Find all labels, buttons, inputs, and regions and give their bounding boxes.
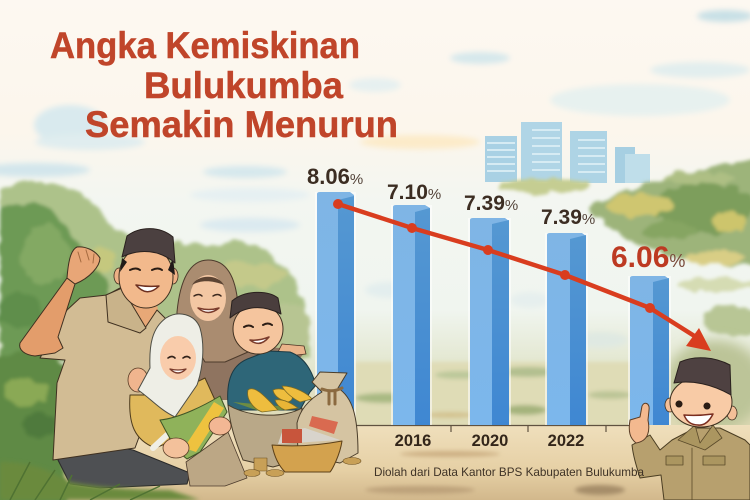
coins xyxy=(244,458,361,476)
father xyxy=(20,229,190,488)
skirt xyxy=(186,432,247,486)
yellow top xyxy=(130,378,215,448)
raised arm xyxy=(20,278,75,356)
bar 2016 group xyxy=(315,192,356,425)
corn held by girl xyxy=(160,396,231,459)
year label 2020: 2020 xyxy=(472,432,508,450)
uniform xyxy=(632,428,750,500)
face xyxy=(160,336,196,380)
neck xyxy=(118,285,160,332)
title: Angka Kemiskinan xyxy=(50,25,360,66)
value label 2016: 8.06% xyxy=(307,164,363,189)
ground shadows xyxy=(365,451,625,495)
cap xyxy=(122,229,175,263)
eyes xyxy=(676,401,710,409)
far right hills xyxy=(665,340,750,430)
value label bar 3: 7.39% xyxy=(464,192,518,215)
axis line xyxy=(316,425,640,432)
shirt xyxy=(40,288,165,460)
trend arrow xyxy=(333,199,711,351)
cuff xyxy=(153,435,167,448)
cap xyxy=(674,358,731,395)
year label 2016: 2016 xyxy=(395,432,431,450)
bar 3 xyxy=(468,218,511,425)
hand xyxy=(629,403,649,443)
hand on shoulder xyxy=(128,368,148,392)
fist xyxy=(67,247,100,284)
source note: Diolah dari Data Kantor BPS Kabupaten Bulukumba xyxy=(374,465,644,479)
bar chart xyxy=(315,192,671,432)
bar 4 xyxy=(545,233,588,425)
bar 5 xyxy=(628,276,671,425)
left trees xyxy=(0,182,310,500)
head xyxy=(670,377,732,427)
collar xyxy=(106,288,146,333)
title: Bulukumba xyxy=(144,65,343,106)
value label bar 4: 7.39% xyxy=(541,206,595,229)
trousers xyxy=(58,440,190,488)
small boy giving thumbs up xyxy=(629,358,750,500)
grass foreground xyxy=(0,462,200,500)
boy in teal shirt xyxy=(228,292,316,410)
distant fields xyxy=(355,362,645,425)
ears xyxy=(665,398,737,420)
mouth xyxy=(136,285,159,292)
right trees xyxy=(500,160,750,336)
family illustration xyxy=(20,229,361,488)
ground xyxy=(0,425,750,500)
year label 2022: 2022 xyxy=(548,432,584,450)
value label bar 5 highlighted: 6.06% xyxy=(611,241,685,274)
ears xyxy=(114,268,178,284)
clouds xyxy=(0,10,750,348)
girl in white hijab xyxy=(128,314,247,486)
title: Semakin Menurun xyxy=(85,104,398,145)
hijab xyxy=(138,314,203,417)
smile xyxy=(684,414,713,425)
bar 2 xyxy=(391,205,432,425)
face xyxy=(119,246,173,308)
grain bag xyxy=(297,372,358,463)
city buildings xyxy=(485,122,650,183)
title xyxy=(50,25,398,145)
woman xyxy=(177,260,305,400)
corn sack xyxy=(228,386,312,467)
value label bar 2: 7.10% xyxy=(387,181,441,204)
collar and pockets xyxy=(666,425,725,500)
basket xyxy=(272,428,342,472)
